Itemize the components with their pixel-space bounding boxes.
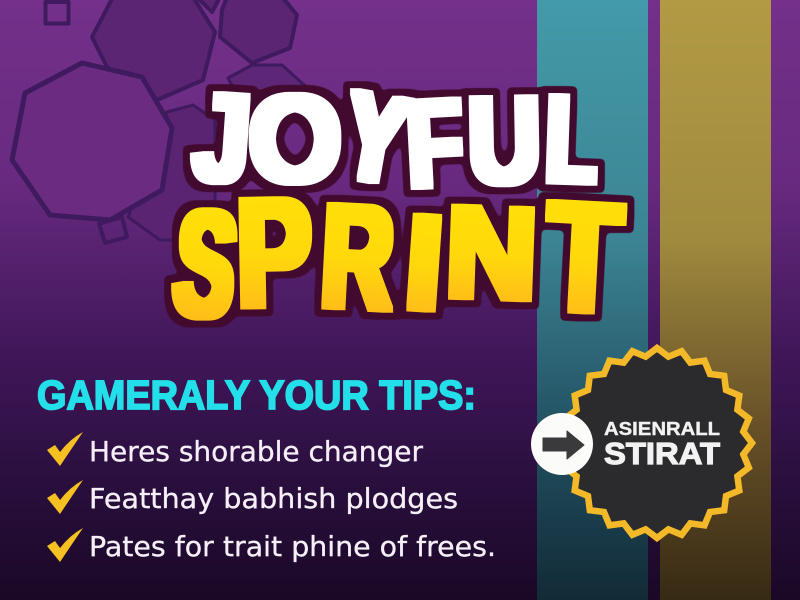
title: JOYFUL: L — [544, 70, 599, 210]
icon: check mark — [47, 528, 83, 562]
title: SPRINT: I — [400, 186, 448, 339]
tip 2: Featthay babhish plodges — [89, 482, 458, 515]
tip 1: Heres shorable changer — [89, 435, 423, 468]
badge text line 1: ASIENRALL — [604, 419, 720, 439]
icon: check mark — [47, 480, 83, 514]
badge text line 2: STIRAT — [604, 436, 720, 471]
title: JOYFUL: O — [249, 70, 341, 209]
title: JOYFUL — [190, 64, 599, 214]
panel: teal column — [537, 0, 648, 600]
title: SPRINT: R — [318, 172, 397, 342]
title: SPRINT: N — [444, 179, 539, 328]
decorative polygons — [12, 0, 312, 243]
icon: check mark — [47, 432, 83, 466]
title: SPRINT: T — [542, 168, 626, 346]
title: SPRINT: S — [167, 178, 243, 352]
title: JOYFUL: F — [404, 72, 466, 214]
title: JOYFUL: U — [467, 70, 541, 210]
panel: gold column — [660, 0, 771, 600]
badge starburst — [562, 348, 752, 538]
title: JOYFUL: Y — [334, 64, 417, 211]
tip 3: Pates for trait phine of frees. — [89, 530, 496, 563]
title: SPRINT: P — [235, 165, 313, 340]
heading: tips: GAMERALY YOUR TIPS: — [37, 372, 476, 418]
title: SPRINT — [167, 165, 626, 352]
icon: arrow circle — [531, 413, 593, 475]
badge — [531, 348, 752, 538]
title: JOYFUL: J — [190, 66, 254, 210]
